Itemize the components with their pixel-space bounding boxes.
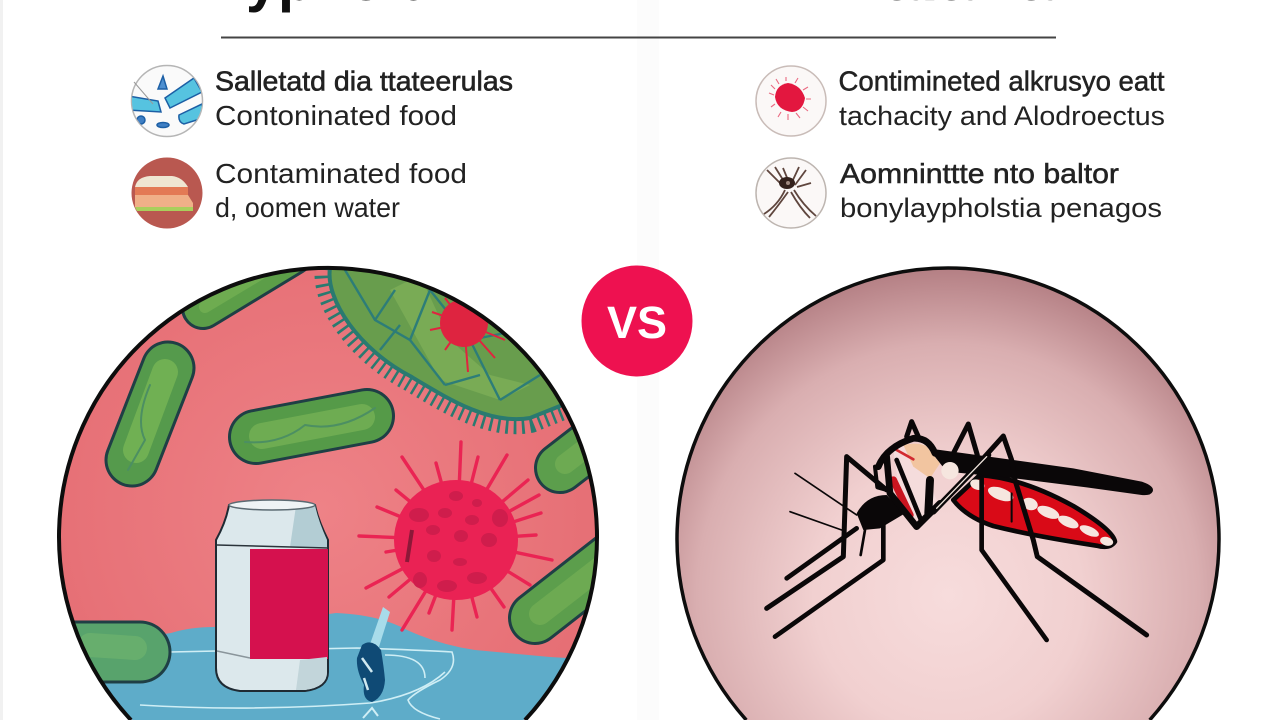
header rule [221,36,1056,38]
soda can [216,500,328,691]
panel: typhoid causes list [128,66,513,228]
text: line two: Contoninated food [215,100,457,131]
illustration: malaria circle [677,268,1219,720]
red virus [359,442,552,630]
water ripples [140,648,454,719]
mosquito [767,422,1153,640]
mosquito legs [767,422,1147,640]
mosquito tail [857,495,905,530]
text: line four: d, oomen water [215,192,400,223]
text: line one: Salletatd dia ttateerulas [215,66,513,96]
panel: malaria causes list [756,66,1165,228]
icon: mosquito [756,158,826,228]
green virus [330,250,580,419]
mosquito proboscis [928,448,1153,495]
text: line three: Aomninttte nto baltor [840,158,1119,189]
badge: VS: VS [607,297,667,348]
mosquito antennae [790,473,857,530]
icon: bacteria under microscope [128,66,203,136]
icon: contaminated food [132,158,202,228]
mosquito abdomen [953,475,1115,547]
water pool [105,613,566,720]
small red virus [430,295,505,372]
text: line two: tachacity and Alodroectus [839,101,1165,131]
text: line three: Contaminated food [215,158,467,189]
illustration: typhoid circle [40,250,622,720]
icon: red parasite [756,66,826,136]
text: line four: bonylaypholstia penagos [840,193,1162,223]
text: line one: Contimineted alkrusyo eatt [838,66,1165,96]
mosquito thorax [878,438,959,525]
badge: VS [582,266,692,376]
water splash [357,607,390,718]
bacteria capsules [40,254,622,652]
